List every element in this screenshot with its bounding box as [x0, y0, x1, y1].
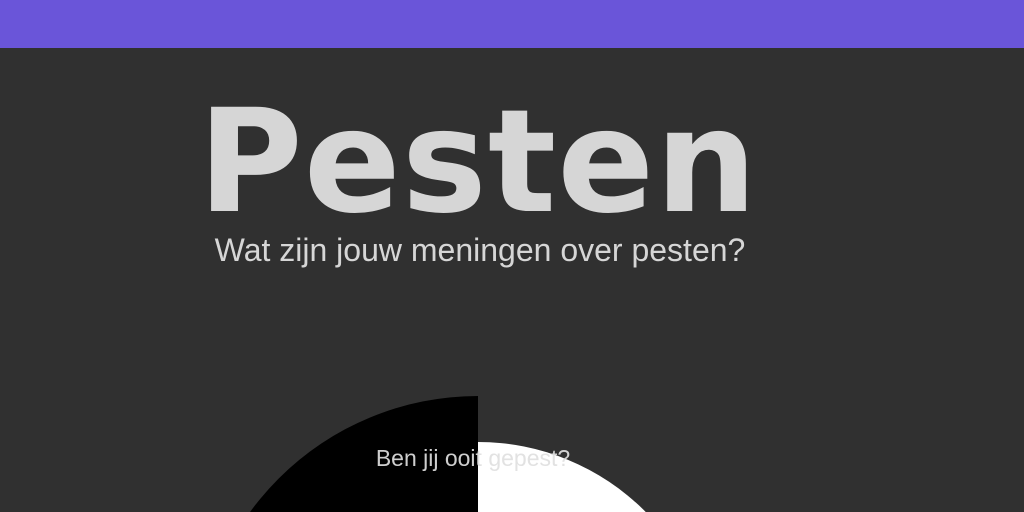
subtitle: Wat zijn jouw meningen over pesten? [215, 232, 745, 268]
chart label: Ben jij ooit gepest? [376, 445, 570, 471]
pie slice: black [196, 396, 478, 512]
header bar [0, 0, 1024, 48]
pie slice: white [478, 442, 714, 512]
title: Pesten [198, 78, 758, 245]
